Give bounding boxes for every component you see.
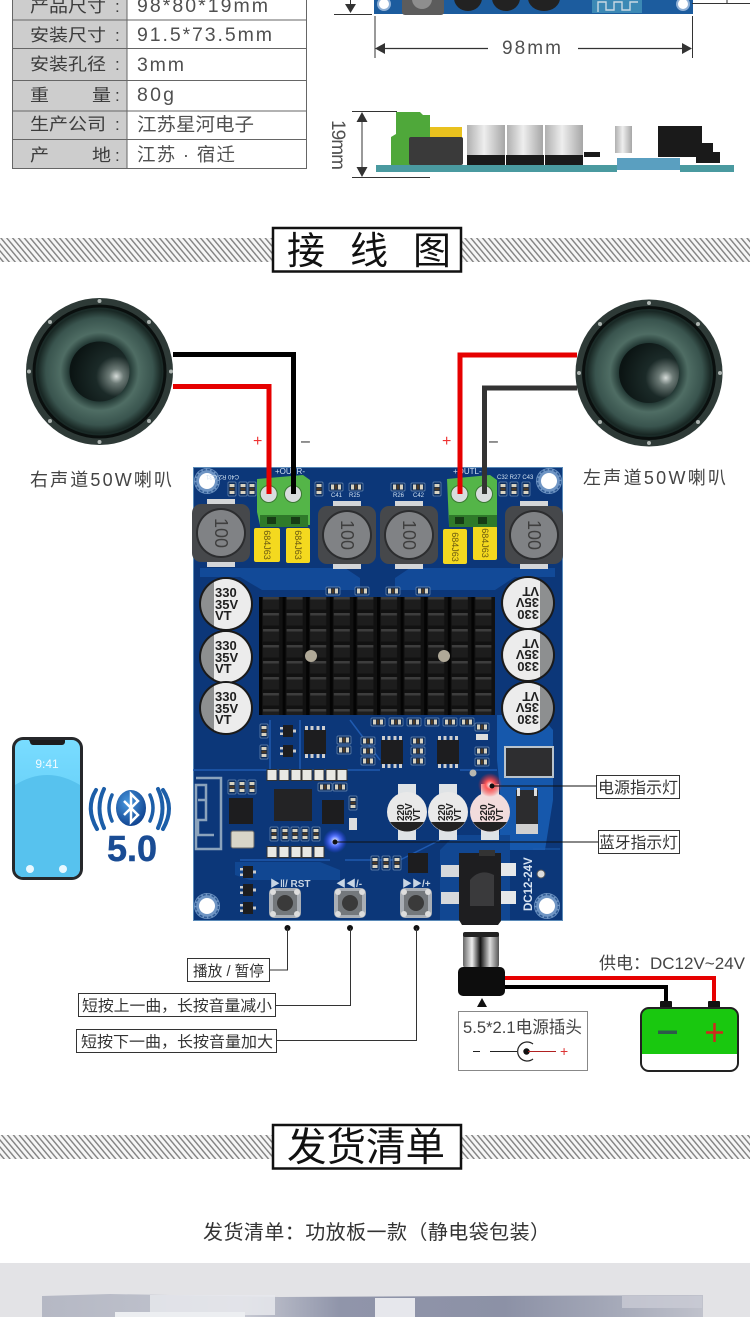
speaker wires right channel <box>173 354 294 494</box>
silkscreen labels: +OUTR- <box>275 467 305 476</box>
electrolytic capacitors 330uF right: 330 <box>517 607 539 622</box>
spec table: 安装尺寸 <box>30 26 106 45</box>
silkscreen labels: C41 <box>331 493 343 499</box>
electrolytic capacitors 220uF: 220 <box>396 804 407 821</box>
spec table: 量 <box>92 86 111 105</box>
top view board strip with 98mm dimension <box>334 0 750 59</box>
callout: play pause button <box>188 925 290 982</box>
spec table: : <box>115 86 120 105</box>
electrolytic capacitors 220uF: VT <box>453 808 464 821</box>
silkscreen labels: C40 R2 C31 <box>205 473 239 479</box>
supply voltage label: 供电：DC12V~24V <box>599 954 746 973</box>
copper trace areas <box>193 568 555 920</box>
spec table <box>12 0 307 169</box>
board voltage label: DC12-24V <box>523 857 535 911</box>
inductors <box>192 499 563 569</box>
electrolytic capacitors 220uF: 35V <box>487 803 498 821</box>
electrolytic capacitors 220uF: 35V <box>404 803 415 821</box>
tactile buttons <box>269 878 432 918</box>
section heading: 接线图 <box>0 228 750 273</box>
electrolytic capacitors 330uF left: 35V <box>215 701 238 716</box>
electrolytic capacitors 330uF left: VT <box>215 661 232 676</box>
bluetooth 5.0 logo: 5.0 <box>107 828 157 869</box>
callout: play pause button: 播放 / 暂停 <box>193 963 264 980</box>
callout: next track button <box>76 925 420 1052</box>
silkscreen labels: +OUTL- <box>453 467 482 476</box>
electrolytic capacitors 220uF: VT <box>412 808 423 821</box>
heatsink <box>259 597 495 715</box>
electrolytic capacitors 330uF left: 330 <box>215 689 237 704</box>
electrolytic capacitors 330uF left: 330 <box>215 585 237 600</box>
electrolytic capacitors 330uF right <box>501 576 555 735</box>
tactile buttons: ▶▶/+ <box>402 878 431 890</box>
battery <box>641 1001 738 1071</box>
spec table: : <box>115 55 120 74</box>
spec table: 江苏 · 宿迁 <box>137 144 235 165</box>
electrolytic capacitors 330uF right: 35V <box>516 647 539 662</box>
spec table: 生产公司 <box>30 115 106 134</box>
mounting holes <box>194 468 562 919</box>
silkscreen labels: C42 <box>413 493 425 499</box>
electrolytic capacitors 330uF left: 35V <box>215 597 238 612</box>
side view board with 19mm dimension: 19mm <box>327 120 348 170</box>
phone illustration: 9:41 <box>35 757 59 771</box>
bluetooth pcb antenna <box>196 778 221 849</box>
speaker: right channel <box>26 298 173 445</box>
electrolytic capacitors 330uF right: VT <box>522 584 539 599</box>
electrolytic capacitors 220uF: VT <box>495 808 506 821</box>
electrolytic capacitors 330uF left: 35V <box>215 650 238 665</box>
spec table: : <box>115 146 120 165</box>
polarity marks: + <box>442 433 451 450</box>
callout: next track button: 短按下一曲，长按音量加大 <box>81 1033 273 1051</box>
polarity marks <box>253 433 498 450</box>
phone illustration <box>12 737 83 880</box>
inductors: 100 <box>399 520 419 550</box>
green screw terminal left <box>257 475 310 527</box>
section heading: 发货清单: 发货清单 <box>287 1126 445 1170</box>
electrolytic capacitors 220uF: 220 <box>437 804 448 821</box>
spec table: 安装孔径 <box>30 55 106 74</box>
silkscreen labels <box>205 467 534 499</box>
yellow film capacitors: 684J63 <box>293 530 303 560</box>
inductors: 100 <box>524 520 544 550</box>
electrolytic capacitors 330uF left: VT <box>215 608 232 623</box>
yellow film capacitors: 684J63 <box>450 532 460 562</box>
electrolytic capacitors 330uF right: VT <box>522 689 539 704</box>
bluetooth 5.0 logo <box>91 789 169 869</box>
spec table: 地 <box>92 146 111 165</box>
plug pointer and 5.5*2.1 plug label: + <box>560 1043 568 1059</box>
electrolytic capacitors 330uF left: VT <box>215 712 232 727</box>
electrolytic capacitors 330uF left <box>199 577 253 735</box>
spec table: 江苏星河电子 <box>137 114 254 135</box>
callout: bluetooth indicator LED <box>332 830 680 854</box>
polarity marks: – <box>301 433 310 450</box>
electrolytic capacitors 330uF left: 330 <box>215 638 237 653</box>
power plug <box>458 932 505 996</box>
electrolytic capacitors 220uF: 35V <box>445 803 456 821</box>
callout: previous track button <box>78 925 353 1016</box>
section heading: 接线图: 接线图 <box>287 231 451 273</box>
spec table: : <box>115 115 120 134</box>
silkscreen labels: R26 <box>393 493 405 499</box>
chips and smd components lower section <box>228 718 560 914</box>
DC jack on board <box>441 850 516 925</box>
electrolytic capacitors 330uF right: 330 <box>517 712 539 727</box>
electrolytic capacitors 220uF: 220 <box>479 804 490 821</box>
spec table: 3mm <box>137 54 184 76</box>
polarity marks: + <box>253 433 262 450</box>
speaker: left channel <box>576 300 722 446</box>
yellow film capacitors: 684J63 <box>262 530 272 560</box>
top view board strip with 98mm dimension: 98mm <box>502 38 561 59</box>
electrolytic capacitors 330uF right: VT <box>522 636 539 651</box>
spec table: 80g <box>137 84 174 106</box>
speaker channel labels: 左声道50W喇叭 <box>583 468 726 488</box>
speaker channel labels <box>30 468 726 490</box>
product photo: antistatic bag <box>0 1263 750 1317</box>
electrolytic capacitors 330uF right: 35V <box>516 700 539 715</box>
silkscreen labels: R25 <box>349 493 361 499</box>
callout: previous track button: 短按上一曲，长按音量减小 <box>82 997 272 1015</box>
speaker wires left channel <box>460 355 577 494</box>
shipping list text: 发货清单：功放板一款（静电袋包装） <box>203 1221 550 1244</box>
inductors: 100 <box>211 518 231 548</box>
inductors: 100 <box>337 520 357 550</box>
spec table: 91.5*73.5mm <box>137 24 272 46</box>
tactile buttons: ◀◀/- <box>336 878 362 890</box>
spec table: 产 <box>30 146 49 165</box>
power wires <box>505 978 714 1003</box>
yellow film capacitors <box>254 526 497 564</box>
callout: bluetooth indicator LED: 蓝牙指示灯 <box>599 834 678 852</box>
indicator LEDs <box>323 773 502 853</box>
green screw terminal right <box>447 475 497 527</box>
electrolytic capacitors 330uF right: 330 <box>517 659 539 674</box>
speaker channel labels: 右声道50W喇叭 <box>30 470 172 490</box>
yellow film capacitors: 684J63 <box>480 528 490 558</box>
amplifier circuit board <box>192 467 563 925</box>
polarity marks: – <box>489 433 498 450</box>
spec table: : <box>115 26 120 45</box>
side view board with 19mm dimension <box>327 112 734 178</box>
callout: power indicator LED <box>490 776 680 798</box>
plug pointer and 5.5*2.1 plug label <box>458 998 588 1070</box>
electrolytic capacitors 330uF right: 35V <box>516 595 539 610</box>
spec table: 重 <box>30 86 49 105</box>
electrolytic capacitors 220uF <box>387 784 510 840</box>
silkscreen labels: C32 R27 C43 <box>497 475 534 481</box>
plug pointer and 5.5*2.1 plug label: 5.5*2.1电源插头 <box>463 1018 582 1037</box>
callout: power indicator LED: 电源指示灯 <box>598 779 678 797</box>
small smd parts, top row <box>228 482 530 595</box>
section heading: 发货清单 <box>0 1125 750 1170</box>
tactile buttons: ▶‖/ RST <box>270 878 311 890</box>
